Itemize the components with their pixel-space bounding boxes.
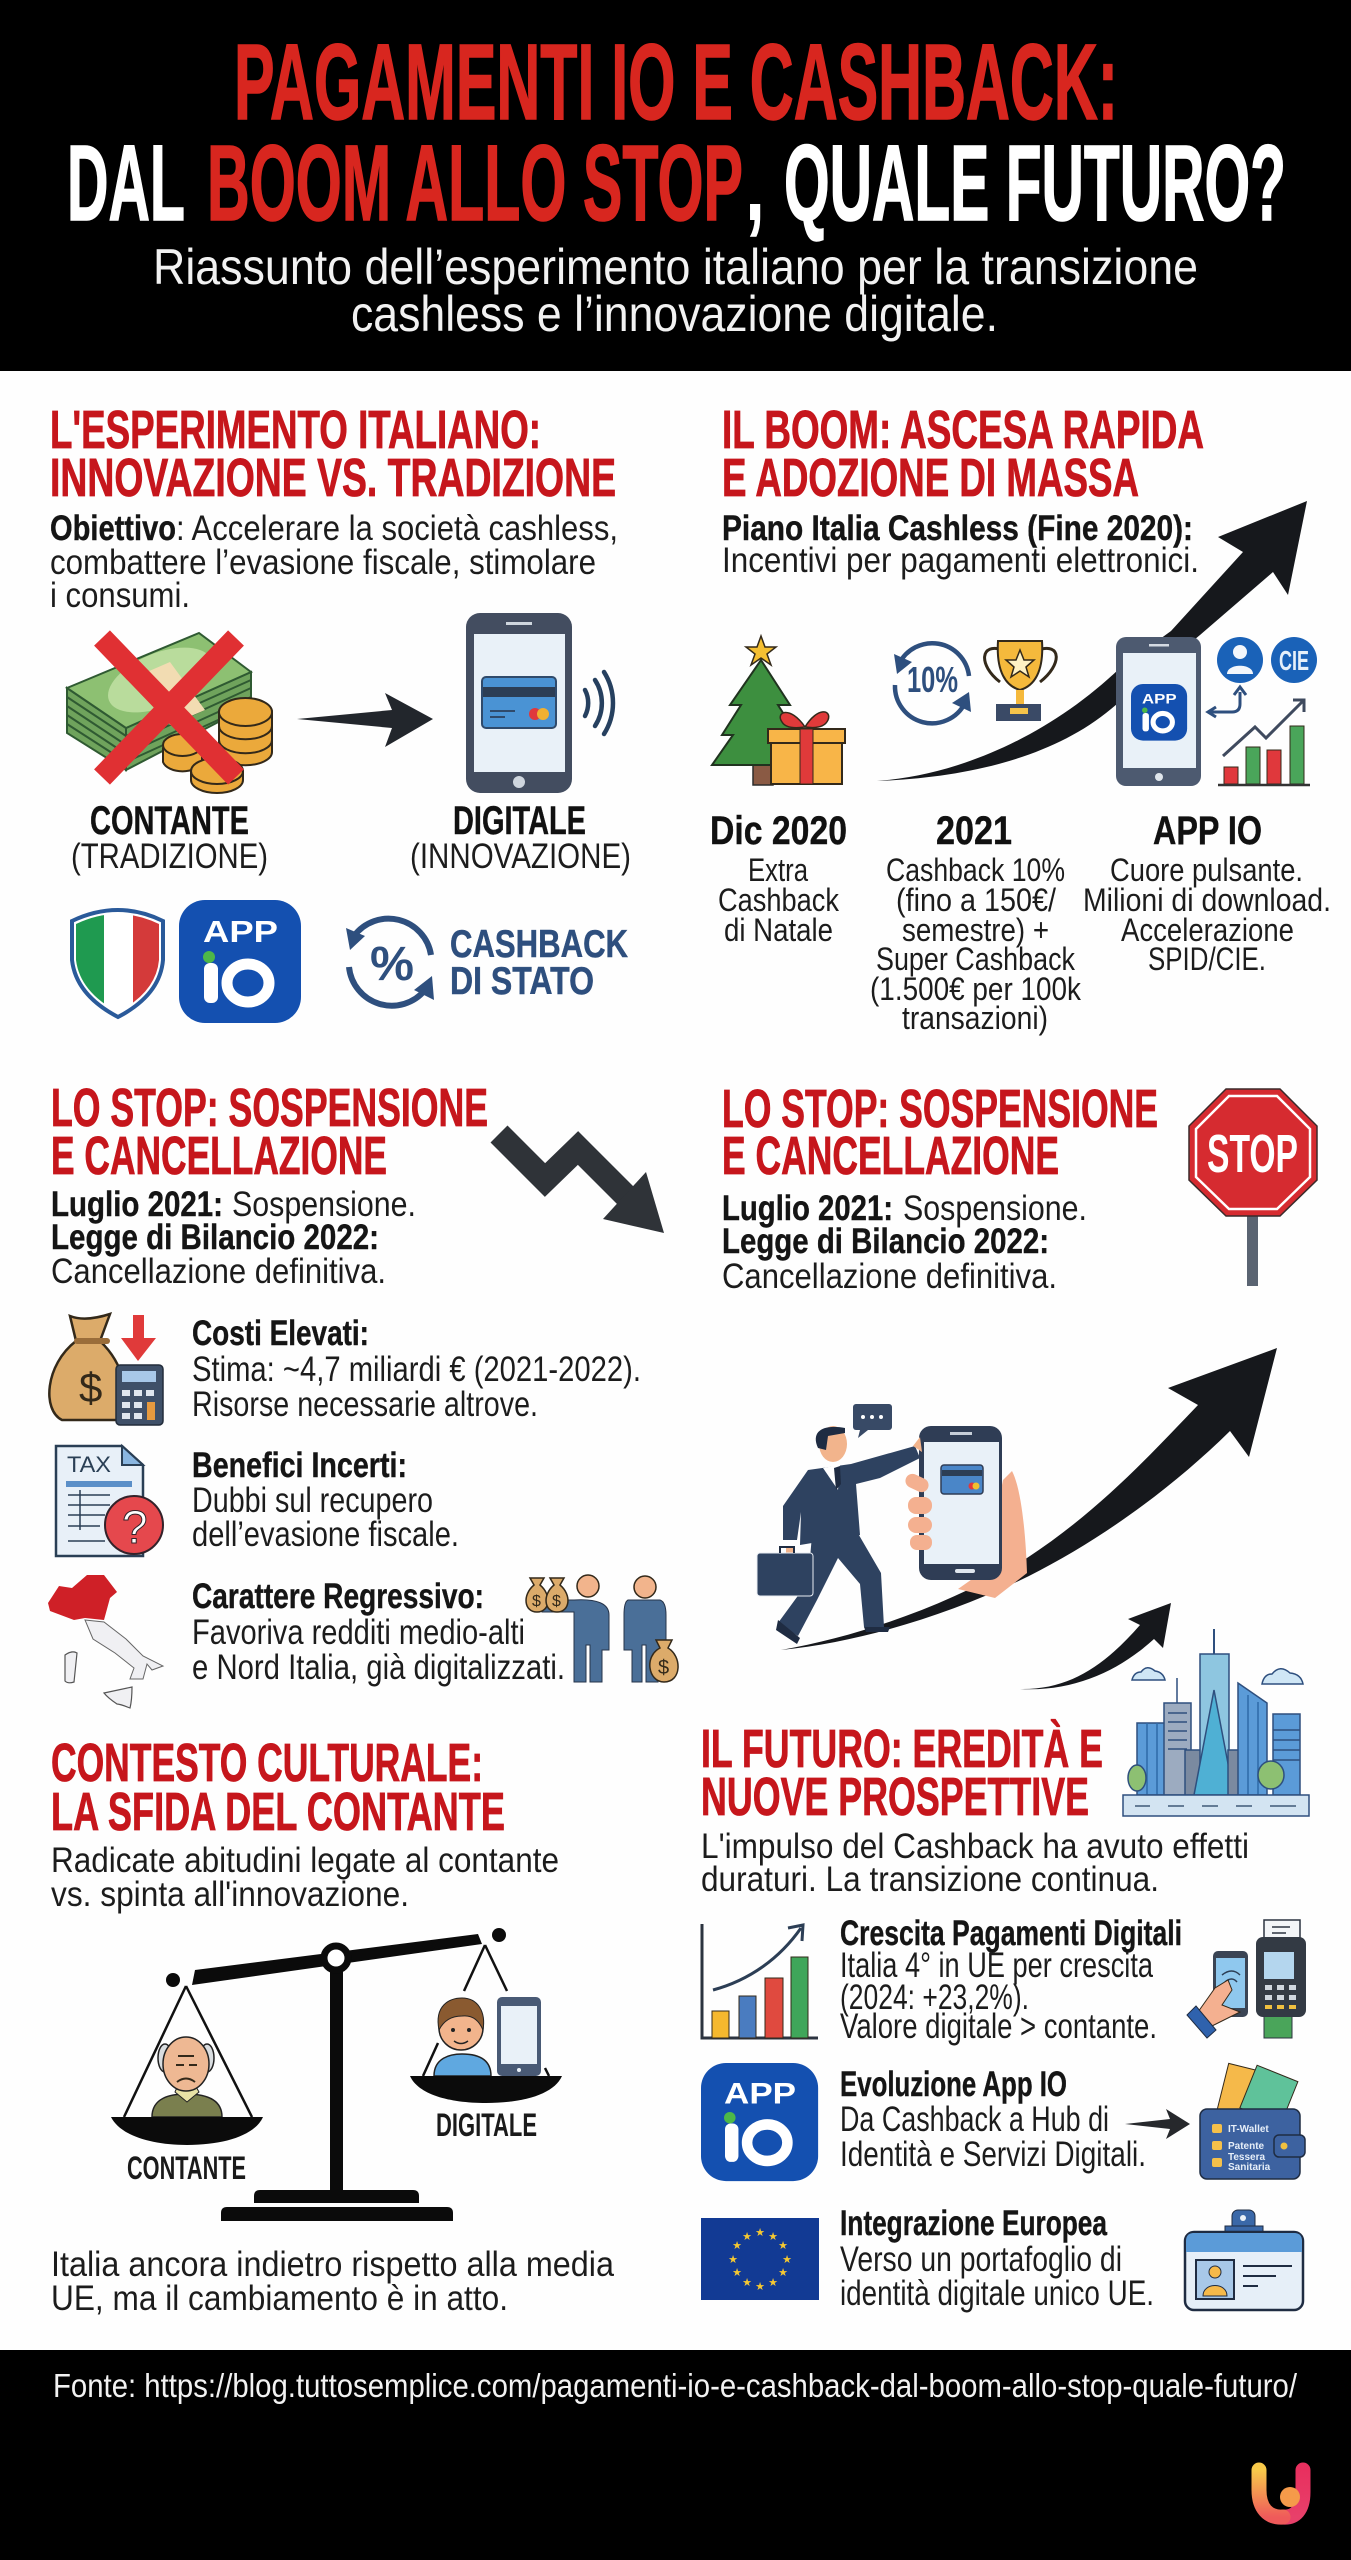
text: evoluzione app io [840, 2064, 1146, 2174]
icon: income inequality figures: $ [658, 1657, 669, 1679]
icon: income inequality figures: $ [532, 1593, 541, 1610]
heading: CONTESTO CULTURALE: [51, 1733, 483, 1793]
text: integrazione europea: Verso un portafoglio di [840, 2239, 1122, 2279]
panel: contesto culturale [51, 1733, 614, 2318]
title line 2: , [745, 122, 765, 243]
text: carattere regressivo: Favoriva redditi medio-alti [192, 1612, 525, 1652]
text: carattere regressivo: Carattere Regressivo: [192, 1576, 484, 1616]
objective text [50, 508, 618, 615]
timeline text: Luglio 2021: [722, 1188, 893, 1228]
logo: cashback di stato: % [370, 938, 414, 991]
icon: tax document with question mark [56, 1446, 163, 1556]
icon: eu flag: ★ [768, 2277, 778, 2289]
icon: spid user badge [1217, 637, 1263, 683]
timeline: app io: APP IO [1153, 809, 1262, 853]
intro text: duraturi. La transizione continua. [701, 1859, 1159, 1899]
timeline text: Sospensione. [903, 1188, 1087, 1228]
icon: tax document with question mark: TAX [67, 1452, 111, 1477]
timeline: 2021: 2021 [936, 809, 1012, 853]
title line 2: BOOM ALLO STOP [207, 122, 743, 243]
icon: mini bar chart [1218, 700, 1310, 785]
timeline: 2021: (1.500€ per 100k [870, 971, 1082, 1007]
title line 2: DAL [67, 122, 185, 243]
logo: cashback di stato [346, 919, 628, 1006]
plan text [722, 508, 1199, 580]
icon: eu flag: ★ [755, 2281, 765, 2293]
icon: eu flag: ★ [778, 2267, 788, 2279]
icon: stop sign: STOP [1207, 1124, 1298, 1184]
text: carattere regressivo: e Nord Italia, già digitalizzati. [192, 1647, 565, 1687]
heading: E ADOZIONE DI MASSA [722, 448, 1139, 508]
icon: id badge [1185, 2210, 1303, 2310]
timeline: dic 2020: Cashback [718, 882, 840, 918]
illustration: balance scale [111, 1928, 562, 2221]
arrow: phone to identity [1208, 687, 1246, 717]
text: benefici incerti [192, 1445, 459, 1554]
icon: phone with app io [1116, 637, 1201, 786]
phone on pan [497, 1997, 541, 2076]
icon: 10 percent cashback cycle: 10% [907, 659, 958, 700]
timeline text: Legge di Bilancio 2022: [722, 1221, 1049, 1261]
icon: cie badge [1271, 637, 1317, 683]
panel: il boom [710, 400, 1331, 1036]
footer band [0, 2350, 1351, 2560]
timeline: dic 2020: Extra [748, 852, 808, 888]
arrow: rising growth [877, 501, 1307, 781]
intro text: L'impulso del Cashback ha avuto effetti [701, 1826, 1249, 1866]
heading: NUOVE PROSPETTIVE [701, 1767, 1089, 1827]
text: crescita pagamenti digitali: Crescita Pagamenti Digitali [840, 1913, 1182, 1953]
panel: il futuro [701, 1603, 1309, 2313]
timeline: app io: SPID/CIE. [1148, 941, 1266, 977]
icon: smartphone with card [466, 613, 613, 793]
young man [434, 1998, 491, 2076]
icon: eu flag: ★ [732, 2267, 742, 2279]
icon: italy map [48, 1575, 163, 1708]
closing text [51, 2244, 614, 2318]
icon: money bag and calculator [49, 1314, 163, 1425]
icon: digital wallet: IT-Wallet [1228, 2124, 1269, 2135]
timeline: dic 2020: di Natale [724, 912, 833, 948]
text: benefici incerti: Benefici Incerti: [192, 1445, 407, 1485]
heading: LA SFIDA DEL CONTANTE [51, 1782, 505, 1842]
text: integrazione europea: Integrazione Europea [840, 2203, 1107, 2243]
heading: E CANCELLAZIONE [51, 1126, 387, 1186]
timeline: app io [1083, 809, 1331, 977]
text: costi elevati: Stima: ~4,7 miliardi € (2021-2022). [192, 1349, 641, 1389]
illustration: hand holding phone [903, 1426, 1027, 1598]
objective text: combattere l’evasione fiscale, stimolare [50, 542, 596, 582]
timeline: app io: Cuore pulsante. [1110, 852, 1303, 888]
app io small logo: APP [1142, 691, 1177, 707]
text: carattere regressivo [192, 1576, 565, 1687]
text: costi elevati: Risorse necessarie altrove. [192, 1384, 538, 1424]
heading [51, 1078, 488, 1186]
app io small logo [1131, 684, 1187, 741]
timeline: 2021: semestre) + [902, 912, 1049, 948]
text: integrazione europea: identità digitale unico UE. [840, 2273, 1154, 2313]
arrow: cashback to hub [1125, 2109, 1190, 2139]
arrow: small growth curve [1020, 1603, 1171, 1689]
icon: income inequality figures: $ [552, 1593, 561, 1610]
heading: INNOVAZIONE VS. TRADIZIONE [50, 448, 616, 508]
icon: eu flag: ★ [742, 2277, 752, 2289]
icon: digital wallet: Tessera [1228, 2152, 1266, 2163]
heading: E CANCELLAZIONE [722, 1126, 1059, 1186]
icon: digital wallet: Patente [1228, 2141, 1265, 2152]
timeline text: Cancellazione definitiva. [722, 1256, 1057, 1296]
icon: digital wallet: Sanitaria [1228, 2162, 1271, 2173]
arrow: zigzag decline [499, 1134, 664, 1233]
icon: app io logo [179, 900, 301, 1023]
subtitle: Riassunto dell’esperimento italiano per la transizione [153, 239, 1198, 295]
icon: app io logo: APP [724, 2077, 796, 2110]
objective text: i consumi. [50, 575, 190, 615]
heading [722, 400, 1204, 508]
icon: money bag and calculator: $ [79, 1364, 102, 1411]
panel: l'esperimento italiano [50, 400, 631, 1023]
timeline text: Sospensione. [232, 1184, 416, 1224]
timeline: 2021: transazioni) [902, 1000, 1048, 1036]
icon: city skyline [1123, 1629, 1309, 1816]
label: contante [71, 799, 268, 876]
icon: eu flag: ★ [782, 2254, 792, 2266]
label: contante: CONTANTE [90, 799, 249, 843]
plan text: Piano Italia Cashless (Fine 2020): [722, 508, 1193, 548]
icon: eu flag [701, 2218, 819, 2300]
label: contante: (TRADIZIONE) [71, 836, 268, 876]
plan text: Incentivi per pagamenti elettronici. [722, 540, 1199, 580]
text: costi elevati: Costi Elevati: [192, 1313, 369, 1353]
timeline: dic 2020 [710, 809, 847, 948]
icon: app io logo [701, 2063, 818, 2181]
label: digitale: DIGITALE [436, 2107, 537, 2143]
logo: cashback di stato: CASHBACK [450, 923, 628, 966]
intro text [701, 1826, 1249, 1899]
icon: christmas tree with gift [712, 636, 845, 785]
heading: L'ESPERIMENTO ITALIANO: [50, 400, 541, 460]
icon: stop sign [1189, 1089, 1317, 1286]
icon: 10 percent cashback cycle [894, 643, 971, 723]
icon: eu flag: ★ [755, 2227, 765, 2239]
icon: eu flag: ★ [742, 2231, 752, 2243]
closing text: UE, ma il cambiamento è in atto. [51, 2278, 508, 2318]
timeline text [51, 1184, 416, 1291]
subtitle: cashless e l’innovazione digitale. [351, 286, 998, 342]
timeline: 2021: Super Cashback [876, 941, 1076, 977]
icon: cie badge: CIE [1279, 645, 1309, 676]
heading [722, 1079, 1158, 1186]
icon: contactless payment terminal [1187, 1920, 1306, 2038]
icon: digital wallet [1200, 2063, 1305, 2179]
illustration: businessman walking [757, 1404, 922, 1644]
text: crescita pagamenti digitali [840, 1913, 1182, 2046]
closing text: Italia ancora indietro rispetto alla media [51, 2244, 614, 2284]
icon: italian shield [72, 900, 163, 1020]
label: contante: CONTANTE [127, 2150, 246, 2186]
panel: lo stop sinistra [48, 1078, 678, 1708]
label: digitale [410, 799, 631, 876]
text: costi elevati [192, 1313, 641, 1424]
logo [1259, 2470, 1303, 2517]
objective text: Obiettivo [50, 508, 176, 548]
text: evoluzione app io: Evoluzione App IO [840, 2064, 1067, 2104]
arrow: cash to digital [297, 693, 433, 747]
panel: lo stop destra [722, 1079, 1317, 1650]
icon: tax document with question mark: ? [122, 1501, 148, 1553]
icon: app io logo: APP [203, 914, 278, 949]
text: evoluzione app io: Identità e Servizi Digitali. [840, 2134, 1146, 2174]
icon: eu flag: ★ [732, 2240, 742, 2252]
timeline text [722, 1188, 1087, 1296]
subtitle [153, 239, 1198, 342]
text: crescita pagamenti digitali: Valore digitale > contante. [840, 2006, 1157, 2046]
intro text: vs. spinta all'innovazione. [51, 1874, 409, 1914]
header band [0, 0, 1351, 371]
text: evoluzione app io: Da Cashback a Hub di [840, 2099, 1109, 2139]
arrow: large growth curve [781, 1348, 1277, 1650]
heading: LO STOP: SOSPENSIONE [51, 1078, 488, 1138]
timeline: 2021: Cashback 10% [886, 852, 1065, 888]
intro text [51, 1840, 559, 1914]
text: crescita pagamenti digitali: (2024: +23,2%). [840, 1977, 1029, 2017]
heading [701, 1719, 1103, 1827]
timeline text: Cancellazione definitiva. [51, 1251, 386, 1291]
text: integrazione europea [840, 2203, 1154, 2313]
icon: eu flag: ★ [778, 2240, 788, 2252]
heading [51, 1733, 505, 1842]
icon: trophy [985, 641, 1056, 721]
intro text: Radicate abitudini legate al contante [51, 1840, 559, 1880]
timeline text: Luglio 2021: [51, 1184, 223, 1224]
label: digitale: DIGITALE [453, 799, 586, 843]
icon: cash stack crossed out [67, 633, 272, 793]
objective text: : Accelerare la società cashless, [176, 508, 618, 548]
label: digitale: (INNOVAZIONE) [410, 836, 631, 876]
timeline: app io: Accelerazione [1121, 912, 1294, 948]
heading: IL FUTURO: EREDITÀ E [701, 1719, 1103, 1779]
timeline: dic 2020: Dic 2020 [710, 809, 847, 853]
timeline text: Legge di Bilancio 2022: [51, 1217, 379, 1257]
timeline: 2021 [870, 809, 1082, 1036]
logo: cashback di stato: DI STATO [450, 960, 594, 1003]
text: benefici incerti: Dubbi sul recupero [192, 1480, 433, 1520]
heading [50, 400, 616, 508]
icon: eu flag: ★ [768, 2231, 778, 2243]
text: benefici incerti: dell’evasione fiscale. [192, 1514, 459, 1554]
text: crescita pagamenti digitali: Italia 4° in UE per crescita [840, 1945, 1153, 1985]
timeline: 2021: (fino a 150€/ [896, 882, 1056, 918]
icon: income inequality figures [526, 1575, 678, 1682]
old man [152, 2037, 222, 2117]
icon: eu flag: ★ [728, 2254, 738, 2266]
icon: growth bar chart [702, 1924, 818, 2038]
